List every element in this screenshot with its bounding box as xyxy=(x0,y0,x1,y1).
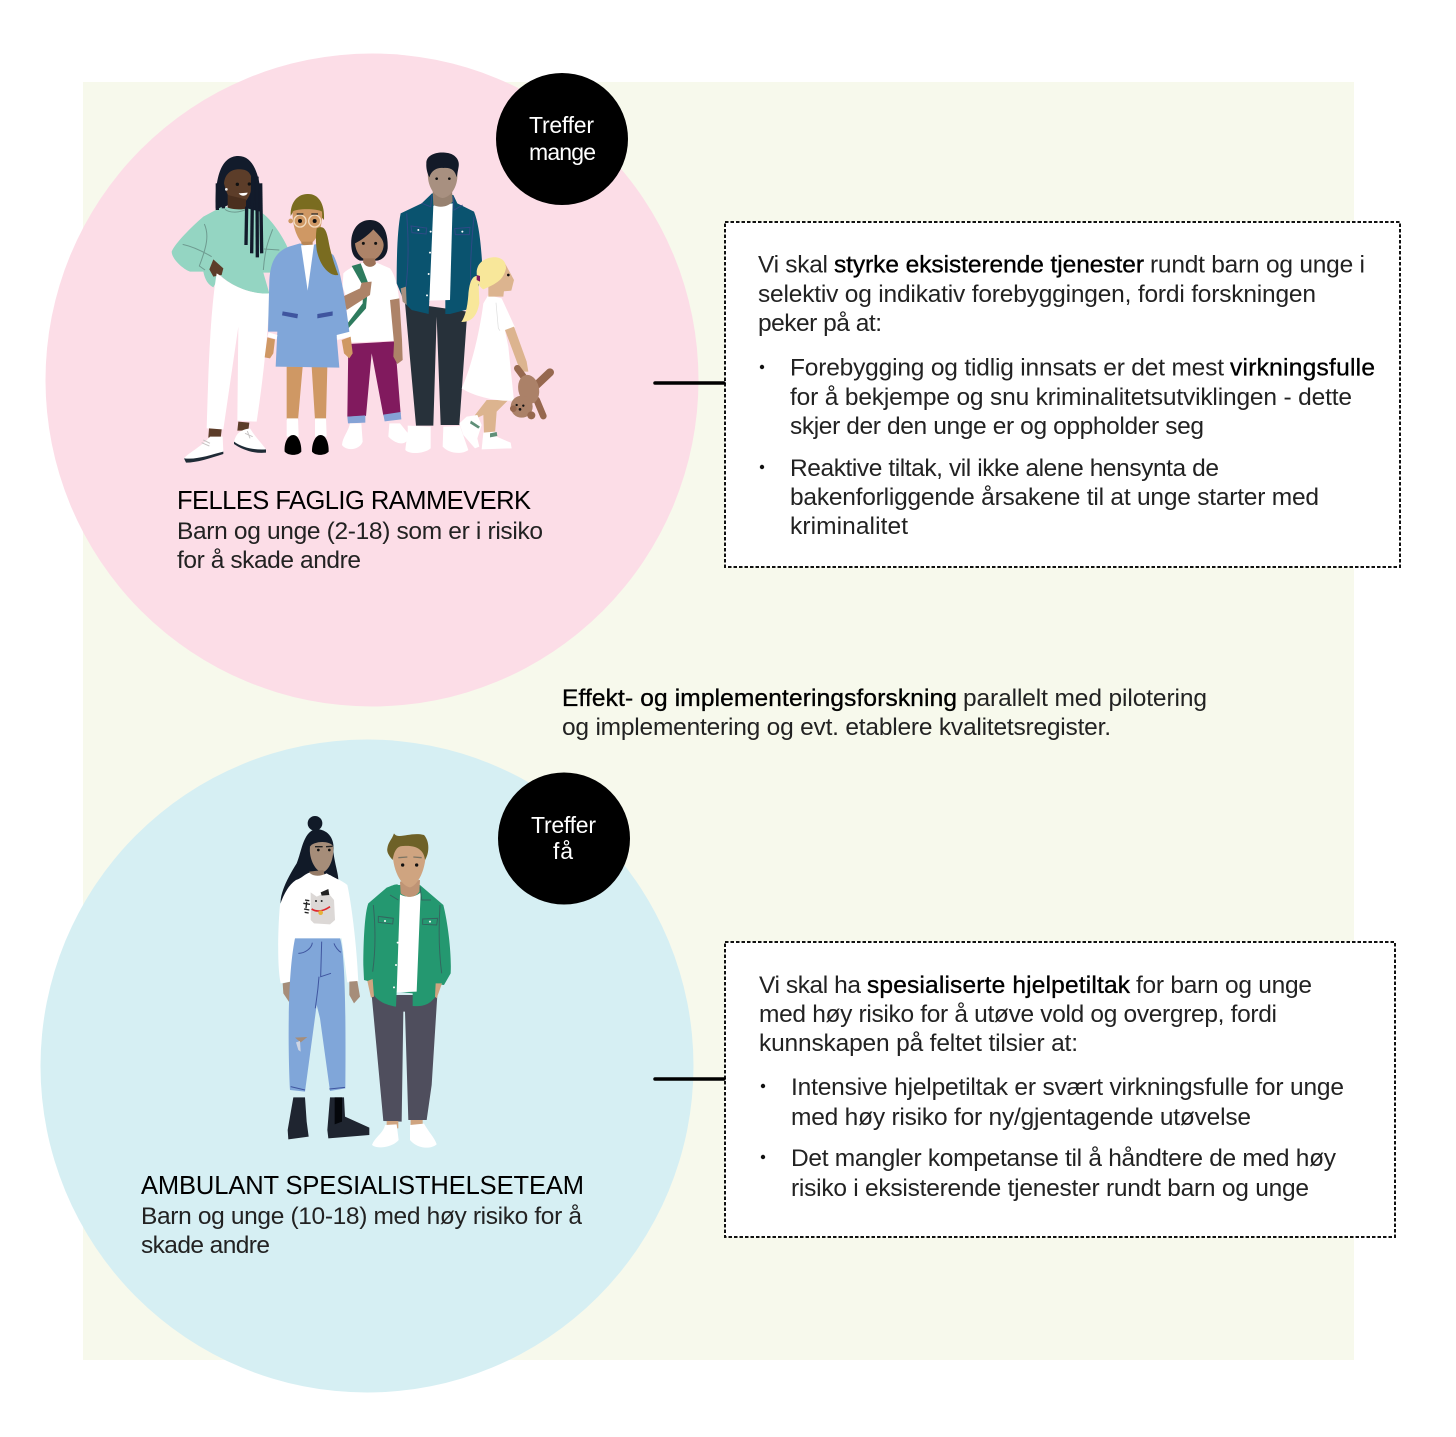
callout box: spesialiserte hjelpetiltak: med høy risiko for å utøve vold og overgrep, fordi xyxy=(759,1001,1277,1028)
bullet list: bakenforliggende årsakene til at unge starter med xyxy=(790,484,1319,511)
person: child with backpack and purple trousers xyxy=(342,220,409,449)
connector line top xyxy=(655,381,724,385)
text block: effekt- og implementeringsforskning xyxy=(562,685,1207,741)
text block: effekt- og implementeringsforskning: og implementering og evt. etablere kvalitetsregister. xyxy=(562,714,1111,741)
callout box: styrke tjenester: Vi skal xyxy=(758,252,828,278)
heading and description: ambulant spesialisthelseteam: skade andre xyxy=(141,1232,270,1259)
heading and description: ambulant spesialisthelseteam: Barn og unge (10-18) med høy risiko for å xyxy=(141,1203,582,1230)
callout box: spesialiserte hjelpetiltak: for barn og unge xyxy=(1136,972,1312,999)
bullet list: Forebygging og tidlig innsats er det mest xyxy=(790,354,1224,382)
badge: Treffer mange: Treffer xyxy=(529,112,594,138)
bullet list: med høy risiko for ny/gjentagende utøvelse xyxy=(791,1104,1251,1131)
person: woman in mint sweater xyxy=(172,156,289,463)
bullet list xyxy=(760,354,1375,540)
callout box: styrke tjenester: peker på at: xyxy=(758,310,882,337)
bullet list: Intensive hjelpetiltak er svært virkningsfulle for unge xyxy=(791,1074,1344,1101)
bullet list xyxy=(761,1074,1344,1202)
bullet list: virkningsfulle xyxy=(1230,354,1375,382)
person: girl in blue blazer and glasses xyxy=(265,194,353,455)
person: man in blue denim shirt xyxy=(397,152,483,453)
illustration: group of five people xyxy=(172,152,550,463)
callout box: spesialiserte hjelpetiltak: kunnskapen på feltet tilsier at: xyxy=(759,1030,1078,1057)
callout box: spesialiserte hjelpetiltak: Vi skal ha xyxy=(759,972,861,999)
person: man in green shirt xyxy=(363,833,451,1148)
callout box: styrke tjenester: rundt barn og unge i xyxy=(1150,252,1365,278)
heading and description: felles faglig rammeverk xyxy=(177,487,543,574)
heading and description: ambulant spesialisthelseteam: AMBULANT SPESIALISTHELSETEAM xyxy=(141,1172,584,1200)
panel: pink circle xyxy=(46,54,698,706)
panel: blue circle xyxy=(40,740,694,1392)
callout box: styrke tjenester xyxy=(725,222,1400,567)
heading and description: felles faglig rammeverk: FELLES FAGLIG RAMMEVERK xyxy=(177,487,531,515)
teddy bear xyxy=(510,368,550,419)
illustration: two young people xyxy=(278,816,451,1148)
bullet list: for å bekjempe og snu kriminalitetsutviklingen - dette xyxy=(790,384,1352,411)
person: blond girl in white dress xyxy=(459,257,550,449)
callout box: styrke tjenester: styrke eksisterende tjenester xyxy=(834,252,1144,278)
bullet list: Reaktive tiltak, vil ikke alene hensynta de xyxy=(790,455,1219,482)
callout box: spesialiserte hjelpetiltak: spesialiserte hjelpetiltak xyxy=(867,972,1131,999)
callout box: styrke tjenester: selektiv og indikativ forebyggingen, fordi forskningen xyxy=(758,281,1316,308)
bullet list: Det mangler kompetanse til å håndtere de med høy xyxy=(791,1145,1337,1172)
connector line bottom xyxy=(655,1077,724,1081)
text block: effekt- og implementeringsforskning: Effekt- og implementeringsforskning xyxy=(562,685,957,712)
heading and description: felles faglig rammeverk: Barn og unge (2-18) som er i risiko xyxy=(177,518,543,545)
person: woman with top knot and jeans xyxy=(278,816,369,1139)
badge: Treffer få: få xyxy=(553,838,573,864)
text block: effekt- og implementeringsforskning: parallelt med pilotering xyxy=(963,685,1207,712)
badge: Treffer få xyxy=(498,772,630,904)
bullet list: skjer der den unge er og oppholder seg xyxy=(790,413,1204,440)
badge: Treffer få: Treffer xyxy=(531,812,596,838)
heading and description: ambulant spesialisthelseteam xyxy=(141,1172,584,1259)
bullet list: risiko i eksisterende tjenester rundt barn og unge xyxy=(791,1175,1309,1202)
badge: Treffer mange: mange xyxy=(529,139,596,165)
bullet list: kriminalitet xyxy=(790,513,908,540)
background panel xyxy=(83,82,1354,1360)
badge: Treffer mange xyxy=(496,73,628,205)
callout box: spesialiserte hjelpetiltak xyxy=(725,942,1395,1237)
heading and description: felles faglig rammeverk: for å skade andre xyxy=(177,547,361,574)
